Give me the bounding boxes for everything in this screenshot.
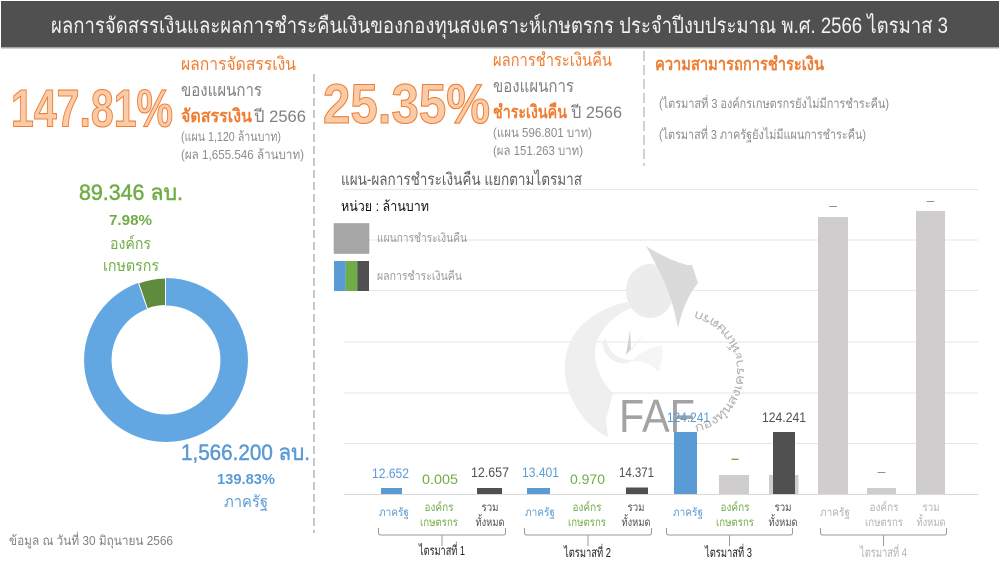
category labels: quarter 2: ภาครัฐ [525, 507, 555, 519]
category labels: quarter 2: ทั้งหมด [622, 514, 650, 529]
label: government sector [181, 440, 310, 511]
value labels: 12.657 [471, 464, 509, 480]
quarter brackets [378, 528, 946, 546]
label: farmer organisations: 7.98% [109, 212, 152, 229]
allocation result block [11, 54, 306, 162]
category labels: quarter 1: เกษตรกร [420, 517, 458, 529]
label: farmer organisations [79, 180, 183, 275]
data date note: ข้อมูล ณ วันที่ 30 มิถุนายน 2566 [9, 532, 173, 549]
category labels: quarter 2: เกษตรกร [568, 517, 606, 529]
allocation result block: จัดสรรเงิน [181, 106, 253, 126]
unit label: หน่วย : ล้านบาท [341, 198, 429, 214]
repayment ability block: (ไตรมาสที่ 3 ภาครัฐยังไม่มีแผนการชำระคืน) [659, 126, 866, 143]
category labels: quarter 3: ภาครัฐ [673, 507, 703, 519]
repayment result block: ผลการชำระเงินคืน [493, 50, 612, 70]
value labels: 124.241 [667, 409, 710, 425]
label: farmer organisations: เกษตรกร [103, 258, 159, 275]
dash labels [731, 192, 935, 479]
chart gridlines [344, 190, 978, 494]
legend: plan: แผนการชำระเงินคืน [377, 231, 467, 245]
quarter labels: ไตรมาสที่ 1 [418, 542, 465, 558]
repayment ability block [655, 54, 889, 143]
value labels: 0.005 [422, 471, 458, 487]
category labels: quarter 1: ภาครัฐ [379, 507, 409, 519]
dash labels: – [829, 197, 837, 213]
category labels: quarter 4 [820, 500, 946, 529]
category labels: quarter 1: ทั้งหมด [476, 514, 504, 529]
category labels: quarter 2: รวม [628, 502, 644, 514]
category labels: quarter 2 [525, 500, 650, 529]
category labels: quarter 4: ทั้งหมด [916, 514, 946, 529]
watermark logo: FAF [619, 390, 695, 442]
quarter labels: ไตรมาสที่ 3 [704, 544, 752, 560]
chart title: แผน-ผลการชำระเงินคืน แยกตามไตรมาส [341, 169, 582, 189]
value labels: 12.652 [372, 465, 409, 481]
value labels: 14.371 [619, 464, 654, 480]
repayment ability block: ความสามารถการชำระเงิน [655, 54, 825, 74]
category labels: quarter 2: องค์กร [572, 500, 602, 514]
category labels: quarter 1 [379, 500, 504, 529]
dashed divider right [643, 51, 645, 166]
category labels: quarter 4: องค์กร [870, 500, 898, 514]
repayment result block: ของแผนการ [493, 76, 574, 96]
category labels: quarter 3: องค์กร [720, 500, 750, 514]
value labels: 124.241 [762, 409, 806, 425]
value labels: 0.970 [570, 471, 605, 487]
bars: quarter 2 result [527, 488, 648, 494]
donut chart [98, 278, 234, 428]
label: farmer organisations: องค์กร [110, 234, 151, 253]
header banner [1, 1, 999, 48]
category labels: quarter 1: รวม [482, 502, 498, 514]
quarter labels: ไตรมาสที่ 2 [563, 544, 611, 560]
label: government sector: 139.83% [217, 471, 275, 488]
quarter labels: ไตรมาสที่ 4 [859, 544, 907, 560]
bars: plan [719, 211, 945, 494]
category labels: quarter 4: เกษตรกร [865, 517, 903, 529]
allocation result block: 147.81% [11, 80, 173, 138]
bars: quarter 3 result [674, 432, 795, 494]
repayment result block: (แผน 596.801 บาท) [493, 125, 592, 140]
repayment result block: ปี 2566 [570, 103, 622, 122]
category labels: quarter 3 [673, 500, 798, 529]
legend: result: ผลการชำระเงินคืน [377, 269, 462, 283]
bars: quarter 1 result [381, 488, 502, 494]
repayment result block: ชำระเงินคืน [493, 102, 568, 122]
category labels: quarter 3: รวม [774, 502, 792, 514]
value labels [372, 409, 806, 487]
repayment ability block: (ไตรมาสที่ 3 องค์กรเกษตรกรยังไม่มีการชำระคืน) [659, 95, 889, 111]
repayment result block [323, 50, 622, 158]
watermark logo [565, 246, 744, 442]
category labels: quarter 4: รวม [922, 502, 940, 514]
category labels: quarter 1: องค์กร [424, 500, 454, 514]
allocation result block: ผลการจัดสรรเงิน [181, 54, 296, 74]
quarter labels [418, 542, 907, 560]
allocation result block: ของแผนการ [181, 80, 262, 100]
label: government sector: ภาครัฐ [224, 494, 268, 511]
repayment result block: (ผล 151.263 บาท) [493, 143, 583, 158]
dashed divider left [313, 74, 315, 533]
dash labels: – [731, 450, 739, 466]
allocation result block: ปี 2566 [253, 107, 306, 126]
allocation result block: (ผล 1,655.546 ล้านบาท) [181, 147, 304, 162]
category labels: quarter 3: ทั้งหมด [768, 514, 798, 529]
category labels: quarter 3: เกษตรกร [716, 517, 754, 529]
legend: plan [334, 224, 467, 254]
dash labels: – [878, 463, 886, 479]
allocation result block: (แผน 1,120 ล้านบาท) [181, 129, 281, 144]
dash labels: – [927, 192, 935, 208]
label: government sector: 1,566.200 ลบ. [181, 440, 310, 465]
repayment result block: 25.35% [323, 72, 490, 135]
value labels: 13.401 [522, 464, 559, 480]
legend: result [334, 261, 462, 291]
category labels: quarter 4: ภาครัฐ [820, 507, 850, 519]
label: farmer organisations: 89.346 ลบ. [79, 180, 183, 205]
